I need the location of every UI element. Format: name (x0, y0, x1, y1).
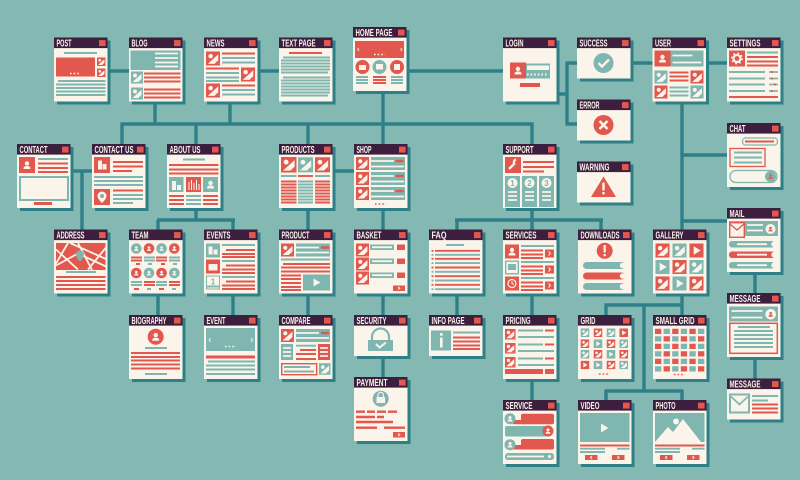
panel: events (204, 230, 260, 296)
heading: gallery: GALLERY (656, 230, 684, 242)
panel: message 2 (727, 378, 784, 422)
connector lines (71, 63, 755, 400)
heading: address: ADDRESS (56, 230, 85, 242)
panel: shop (354, 144, 410, 211)
heading: photo: PHOTO (656, 401, 676, 412)
heading: user: USER (655, 38, 671, 50)
heading: message: MESSAGE (730, 294, 761, 305)
panel: warning (577, 162, 634, 206)
heading: support: SUPPORT (506, 145, 534, 156)
panel: support: 3 (544, 179, 549, 188)
heading: chat: CHAT (730, 124, 746, 135)
panel: gallery (653, 230, 710, 296)
panel: news (204, 38, 260, 104)
heading: team: TEAM (132, 230, 148, 242)
panel: contact us (92, 144, 148, 211)
panel: support: 2 (527, 179, 532, 188)
panel: contact (17, 144, 74, 211)
panel: login (503, 38, 560, 104)
heading: contact us: CONTACT US (94, 145, 134, 156)
heading: pricing: PRICING (506, 316, 531, 327)
heading: news: NEWS (206, 38, 225, 50)
heading: biography: BIOGRAPHY (132, 316, 167, 327)
panel: text page (279, 38, 336, 104)
heading: shop: SHOP (356, 145, 372, 156)
heading: compare: COMPARE (282, 316, 311, 327)
panel: home page (353, 27, 410, 94)
heading: text page: TEXT PAGE (282, 38, 316, 50)
panel: video (578, 400, 634, 467)
panel: payment (354, 377, 410, 444)
panel: pricing (503, 315, 560, 382)
panel: security (354, 315, 410, 359)
heading: products: PRODUCTS (282, 145, 315, 156)
panel: support: 1 (510, 179, 515, 188)
heading: faq: FAQ (432, 230, 447, 242)
heading: about us: ABOUT US (170, 145, 201, 156)
panel: error (577, 100, 634, 144)
heading: security: SECURITY (356, 316, 387, 327)
panel: events: 1 (211, 278, 216, 286)
panel: support (503, 144, 560, 211)
heading: mail: MAIL (730, 209, 744, 220)
panel: downloads (578, 230, 634, 296)
heading: settings: SETTINGS (730, 38, 761, 50)
panel: services (503, 230, 560, 296)
panel: photo (653, 400, 710, 467)
heading: info page: INFO PAGE (432, 316, 465, 327)
heading: downloads: DOWNLOADS (580, 230, 620, 242)
panel: small grid (653, 315, 710, 382)
panel: grid (578, 315, 634, 382)
heading: grid: GRID (580, 316, 596, 327)
heading: contact: CONTACT (20, 145, 48, 156)
panel: settings (727, 38, 784, 104)
heading: error: ERROR (580, 100, 600, 112)
heading: product: PRODUCT (282, 230, 310, 242)
panel: about us (167, 144, 224, 211)
panel: address (54, 230, 110, 296)
panel: compare (279, 315, 336, 382)
heading: service: SERVICE (506, 401, 533, 412)
panel: mail (727, 208, 784, 275)
heading: event: EVENT (206, 316, 226, 327)
panel: message (727, 293, 784, 360)
heading: message 2: MESSAGE (730, 380, 761, 390)
heading: blog: BLOG (132, 38, 148, 50)
heading: services: SERVICES (506, 230, 537, 242)
panel: faq (429, 230, 486, 296)
panel: chat (727, 123, 784, 190)
heading: login: LOGIN (506, 38, 524, 50)
heading: video: VIDEO (580, 401, 600, 412)
panel: success (577, 38, 634, 82)
panel: basket (354, 230, 410, 296)
heading: events: EVENTS (206, 230, 231, 242)
panel: event (204, 315, 260, 382)
panel: post (54, 38, 110, 104)
panel: user (652, 38, 709, 104)
panel: team (129, 230, 186, 296)
heading: warning: WARNING (580, 162, 610, 174)
heading: basket: BASKET (356, 230, 382, 242)
heading: post: POST (56, 38, 72, 50)
heading: home page: HOME PAGE (356, 28, 393, 39)
heading: small grid: SMALL GRID (656, 316, 694, 327)
panel: blog (129, 38, 186, 104)
panel: product (279, 230, 336, 296)
panel: info page (429, 315, 486, 359)
panel: products (279, 144, 336, 211)
panel: service (503, 400, 560, 467)
heading: success: SUCCESS (580, 38, 608, 50)
heading: payment: PAYMENT (356, 378, 388, 389)
panel: biography (129, 315, 186, 382)
